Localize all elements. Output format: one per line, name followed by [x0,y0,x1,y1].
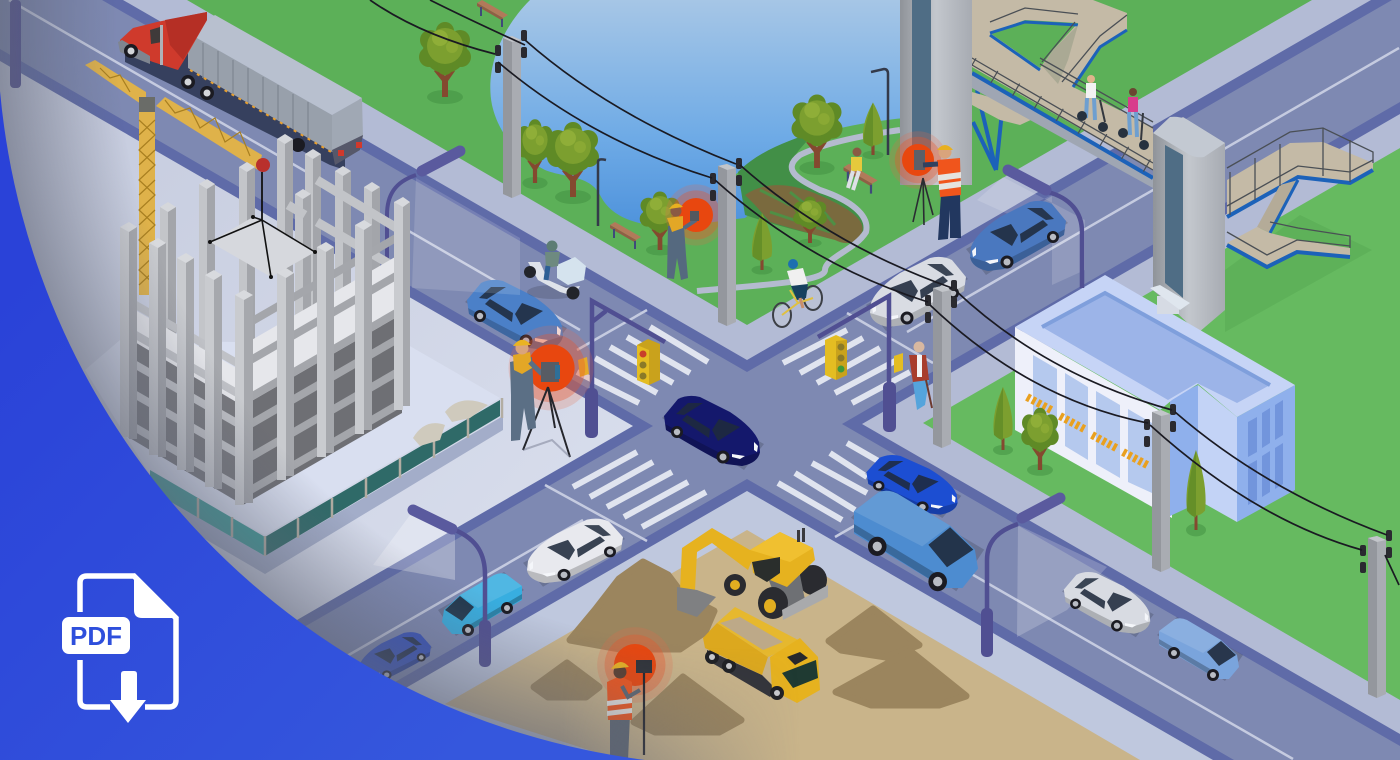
car: blue sedan top right [966,201,1068,275]
excavator [677,528,828,620]
office building [1015,275,1295,522]
ground: south block sidewalk [271,485,1224,760]
back columns [160,134,400,387]
lawn: pillar and stair shadows [1225,215,1372,332]
corner pole top left [10,0,21,88]
car: silver hatchback [1062,572,1154,637]
traffic light: east [818,296,903,432]
bridge supports [973,90,1003,170]
hanging floor slab [208,215,317,279]
car: navy sedan in intersection [662,396,764,470]
person sitting on bench [848,148,862,190]
small park lamps [598,69,888,226]
icon: PDF download [62,573,179,723]
construction site pad [85,340,503,574]
surveyor on sand lot [597,627,673,760]
park trees [419,22,884,275]
park terraced hollow [738,132,866,243]
tower crane [85,60,270,295]
concrete building under construction [120,134,410,505]
icon: PDF download: PDF [70,621,122,651]
ground: construction block sidewalk [0,55,643,760]
van: cyan [438,572,524,636]
cyclist [773,259,822,327]
pedestrian with walking stick [909,342,932,410]
car: blue bottom left [356,632,432,684]
bridge pillar: left [900,0,972,185]
bridge right stairs [1227,128,1373,267]
scooter rider [524,240,586,300]
street lamp: top right light [977,177,1085,285]
car: white sedan [523,519,625,587]
power lines [370,0,1399,585]
van: light blue small [1157,617,1243,681]
park footpath [697,130,900,291]
car: royal blue sedan [864,455,961,518]
curved edge shadow [0,0,770,760]
street lamp: top right [1008,170,1082,288]
floor beams [128,230,402,499]
lake [490,0,905,226]
street lamp: bottom right [981,498,1060,657]
bus shelter [1150,285,1190,314]
sand lot [445,530,1140,760]
scooter riders on bridge [1077,75,1149,150]
car: white hatchback [866,257,968,331]
utility poles [495,30,1392,698]
surveyor in park with scanner [665,184,727,280]
lamp: bottom right light [1017,525,1107,637]
car: blue sedan west road [465,280,567,354]
dark lower floors: south face [128,338,243,505]
bridge pillar: right [1153,117,1225,333]
parked truck [118,12,363,170]
blue curved panel [0,91,645,760]
stair landing below bridge [972,92,1035,125]
upper floor slabs: east face [243,253,402,412]
upper floor slabs: south face [128,306,243,406]
van: large blue [851,489,984,591]
street lamp: bottom left [373,510,491,667]
crosswalks [573,327,910,527]
lawn: park [187,0,1312,325]
dump truck [703,607,820,703]
lawn: east block [923,148,1400,700]
surveyor at tripod by road [889,131,961,240]
street lamp: top left [387,151,520,295]
park benches [477,0,878,249]
dark lower floors: east face [243,314,402,505]
dirt mounds [534,562,966,732]
pedestrian bridge deck with stairs [972,0,1153,188]
traffic light: west [578,301,665,438]
east trees [993,387,1206,536]
surveyor with tripod scanner [509,326,593,457]
front columns [120,197,410,505]
